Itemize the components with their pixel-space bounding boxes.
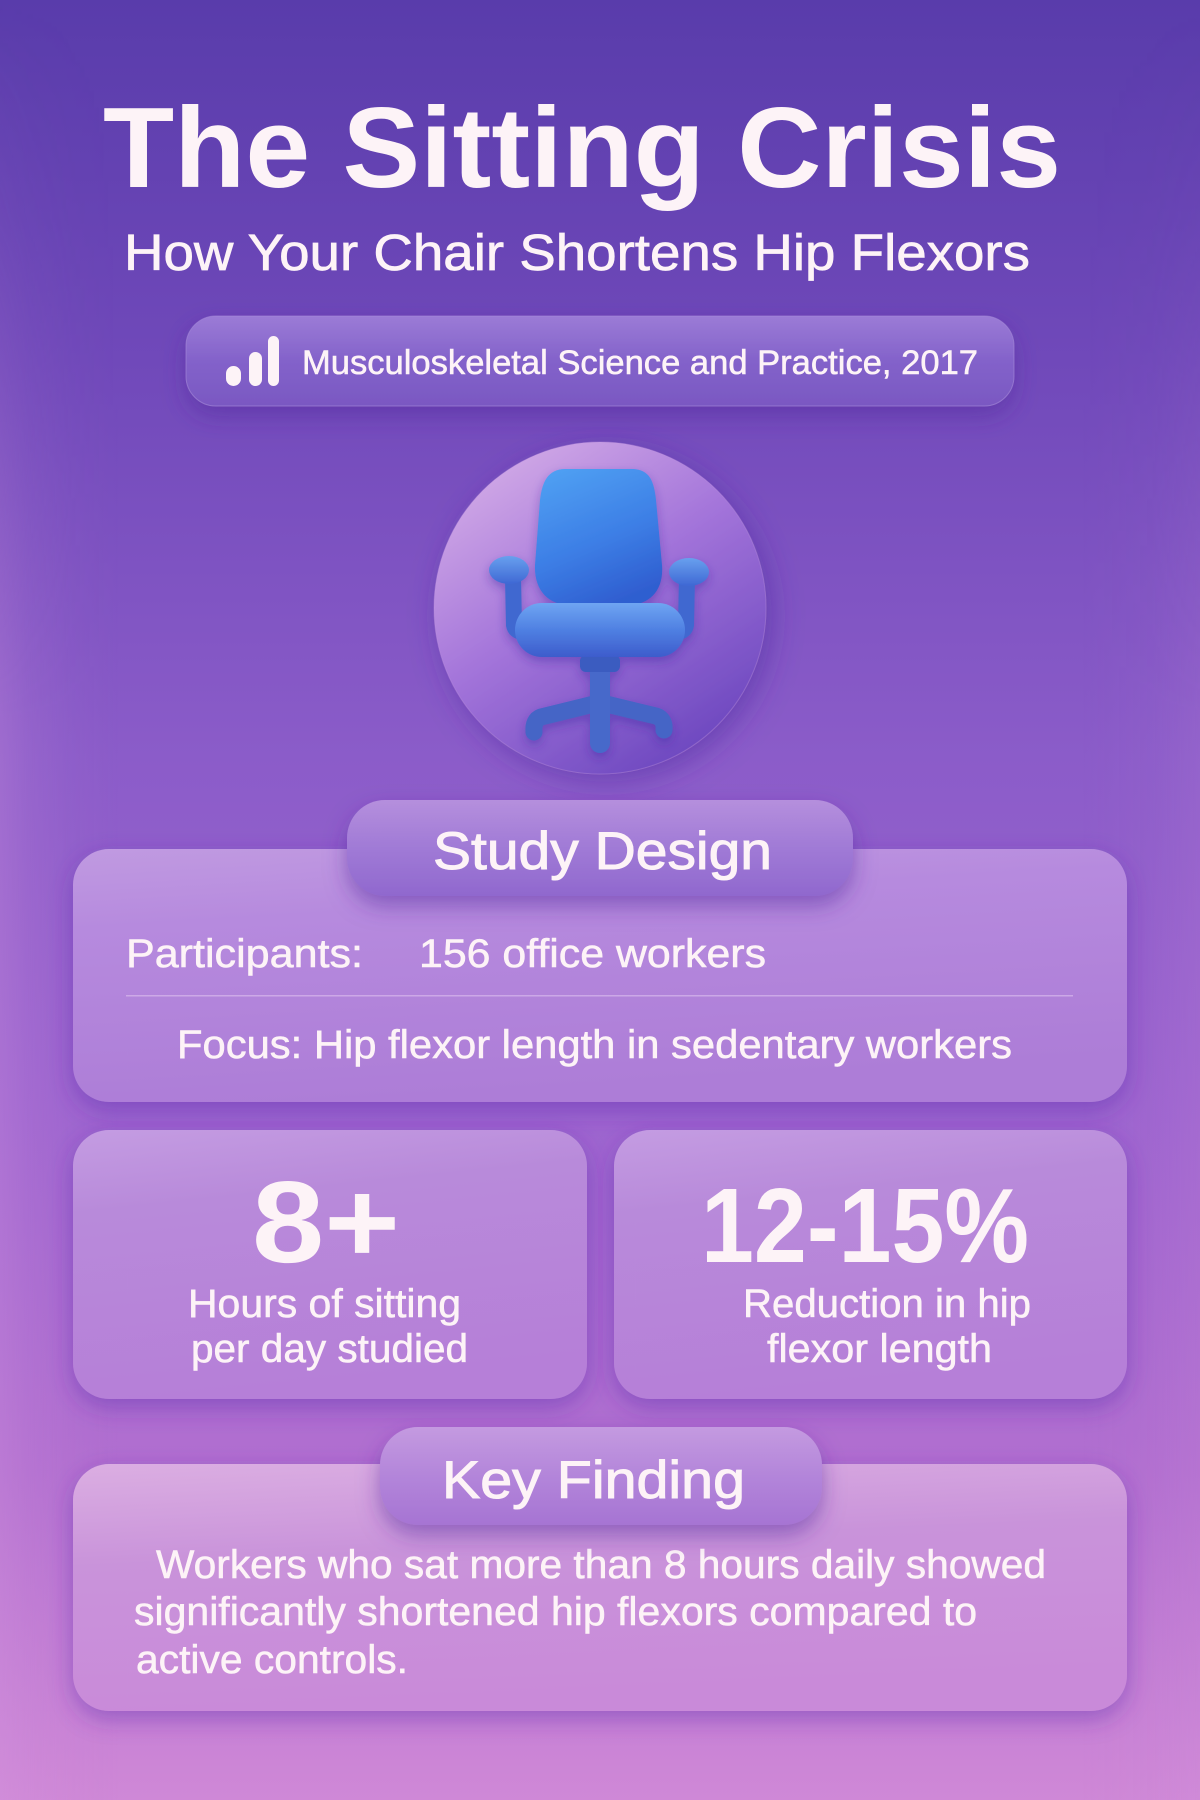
participants label: Participants: [126,932,363,976]
chair base [534,670,664,743]
panel: hours stat [73,1130,587,1399]
subtitle: How Your Chair Shortens Hip Flexors [124,224,1030,281]
heading: study design [347,800,853,896]
icon: office chair [489,469,709,743]
chair illustration [434,442,766,774]
heading: study design: Study Design [433,822,772,881]
stat label [188,1282,468,1371]
armrest pads [489,556,529,584]
source pill [186,316,1014,406]
stat number: 12-15% [701,1167,1029,1285]
icon backing circle [434,442,766,774]
stat label: Hours of sitting [188,1282,461,1326]
stat number: 8+ [252,1157,400,1287]
stat label: flexor length [767,1327,992,1371]
finding text: Workers who sat more than 8 hours daily showed [156,1543,1046,1587]
seat cushion [515,603,685,657]
participants value: 156 office workers [419,932,766,976]
focus line: Focus: Hip flexor length in sedentary workers [177,1023,1012,1067]
finding text: significantly shortened hip flexors compared to [134,1590,977,1634]
icon: signal bars [226,336,279,386]
panel: reduction stat [614,1130,1127,1399]
armrest posts [513,578,522,632]
panel: study design [73,849,1127,1102]
stat label [743,1282,1031,1371]
title: The Sitting Crisis [103,85,1061,212]
panel: key finding [73,1464,1127,1711]
stat label: per day studied [191,1327,468,1371]
heading: key finding [380,1427,822,1525]
finding text: active controls. [136,1638,408,1682]
journal citation: Musculoskeletal Science and Practice, 2017 [302,344,978,382]
heading: key finding: Key Finding [442,1451,745,1510]
backrest [535,469,662,605]
stat label: Reduction in hip [743,1282,1031,1326]
finding text [134,1543,1046,1682]
